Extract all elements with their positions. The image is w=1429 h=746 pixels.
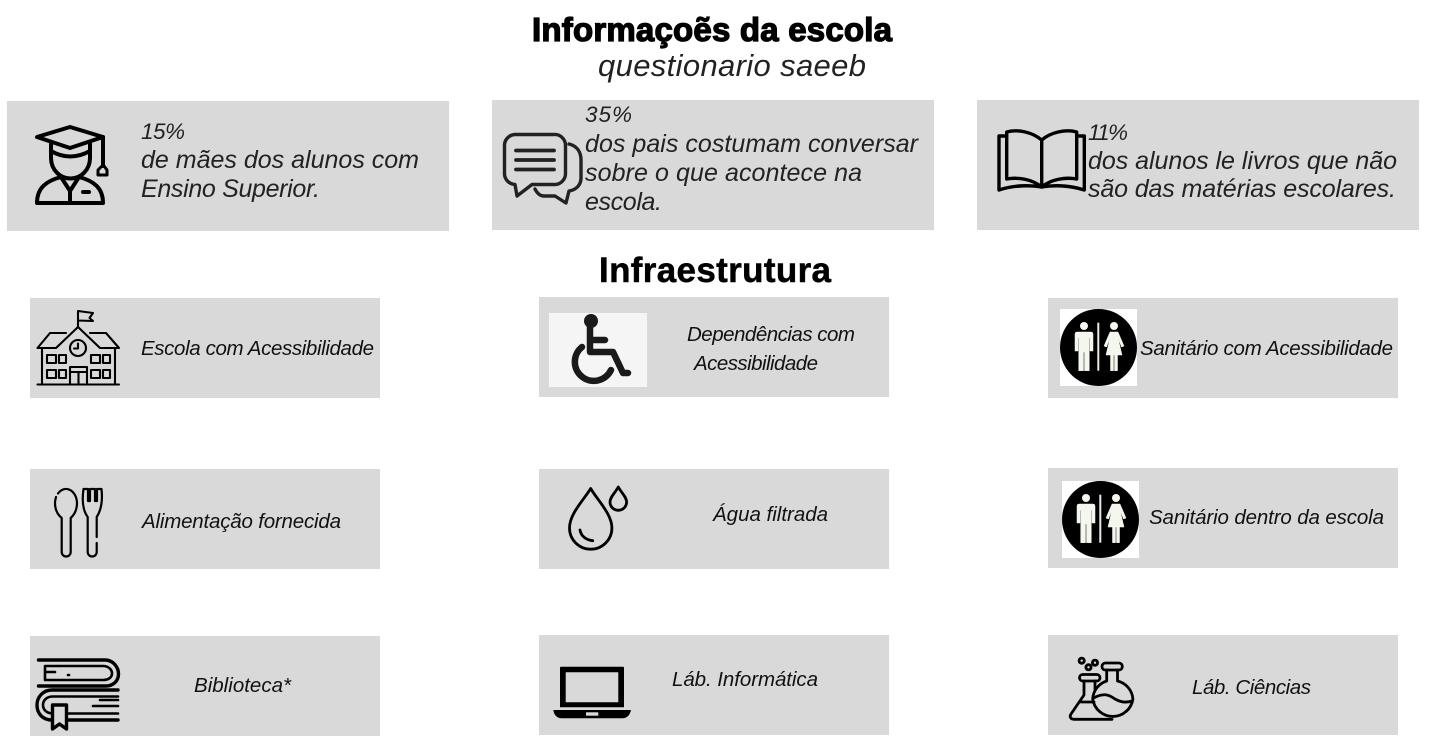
text: 35%: escola. (585, 188, 662, 216)
label: Láb. Ciências (1192, 676, 1311, 699)
label: Escola com Acessibilidade (141, 337, 374, 360)
subtitle: questionario saeeb (598, 48, 866, 83)
panel: accessible toilet (1048, 298, 1398, 398)
title: Informaçoẽs da escola (532, 11, 893, 48)
panel: toilet inside school (1048, 468, 1398, 568)
label: Alimentação fornecida (140, 510, 341, 533)
text: 11%: dos alunos le livros que não (1088, 147, 1397, 175)
text: 35%: sobre o que acontece na (585, 159, 862, 187)
icon: speech bubbles (504, 134, 581, 203)
text: 15%: de mães dos alunos com (141, 146, 419, 174)
icon: stacked books (37, 660, 118, 729)
panel: library (30, 636, 380, 736)
panel: computer lab (539, 635, 889, 735)
text: 35%: dos pais costumam conversar (585, 130, 920, 158)
label: Dependências com (687, 323, 855, 346)
label: Biblioteca* (194, 674, 292, 697)
panel: school accessibility (30, 298, 380, 398)
icon: school building (38, 311, 119, 384)
label: Sanitário com Acessibilidade (1140, 337, 1393, 360)
icon: wheelchair (549, 313, 647, 387)
text: 35% (585, 102, 920, 216)
icon: flasks (1070, 658, 1133, 719)
panel: parents talk about school (492, 100, 934, 230)
panel: science lab (1048, 635, 1398, 735)
text: 35%: 35% (585, 102, 632, 127)
text: 15%: 15% (141, 119, 185, 144)
heading: infraestrutura: Infraestrutura (599, 251, 832, 290)
icon: restroom (1060, 309, 1137, 386)
panel: accessible facilities (539, 297, 889, 397)
panel: students read books (977, 100, 1419, 230)
icon: water drops (570, 487, 627, 549)
text: 11%: 11% (1088, 120, 1128, 145)
text: 11% (1088, 120, 1397, 203)
label: Água filtrada (712, 503, 828, 526)
panel: mothers with higher education (7, 101, 449, 231)
text: 15% (141, 119, 419, 203)
icon: laptop (553, 667, 631, 718)
text: 11%: são das matérias escolares. (1088, 175, 1396, 203)
text: 15%: Ensino Superior. (141, 175, 320, 203)
panel: food provided (30, 469, 380, 569)
panel: filtered water (539, 469, 889, 569)
icon: open book (999, 131, 1084, 190)
icon: graduate (37, 127, 107, 203)
label: Láb. Informática (672, 668, 818, 691)
icon: spoon and fork (55, 489, 102, 556)
label: Acessibilidade (692, 352, 818, 375)
label (687, 323, 855, 375)
icon: restroom (1062, 481, 1139, 558)
label: Sanitário dentro da escola (1149, 506, 1384, 529)
